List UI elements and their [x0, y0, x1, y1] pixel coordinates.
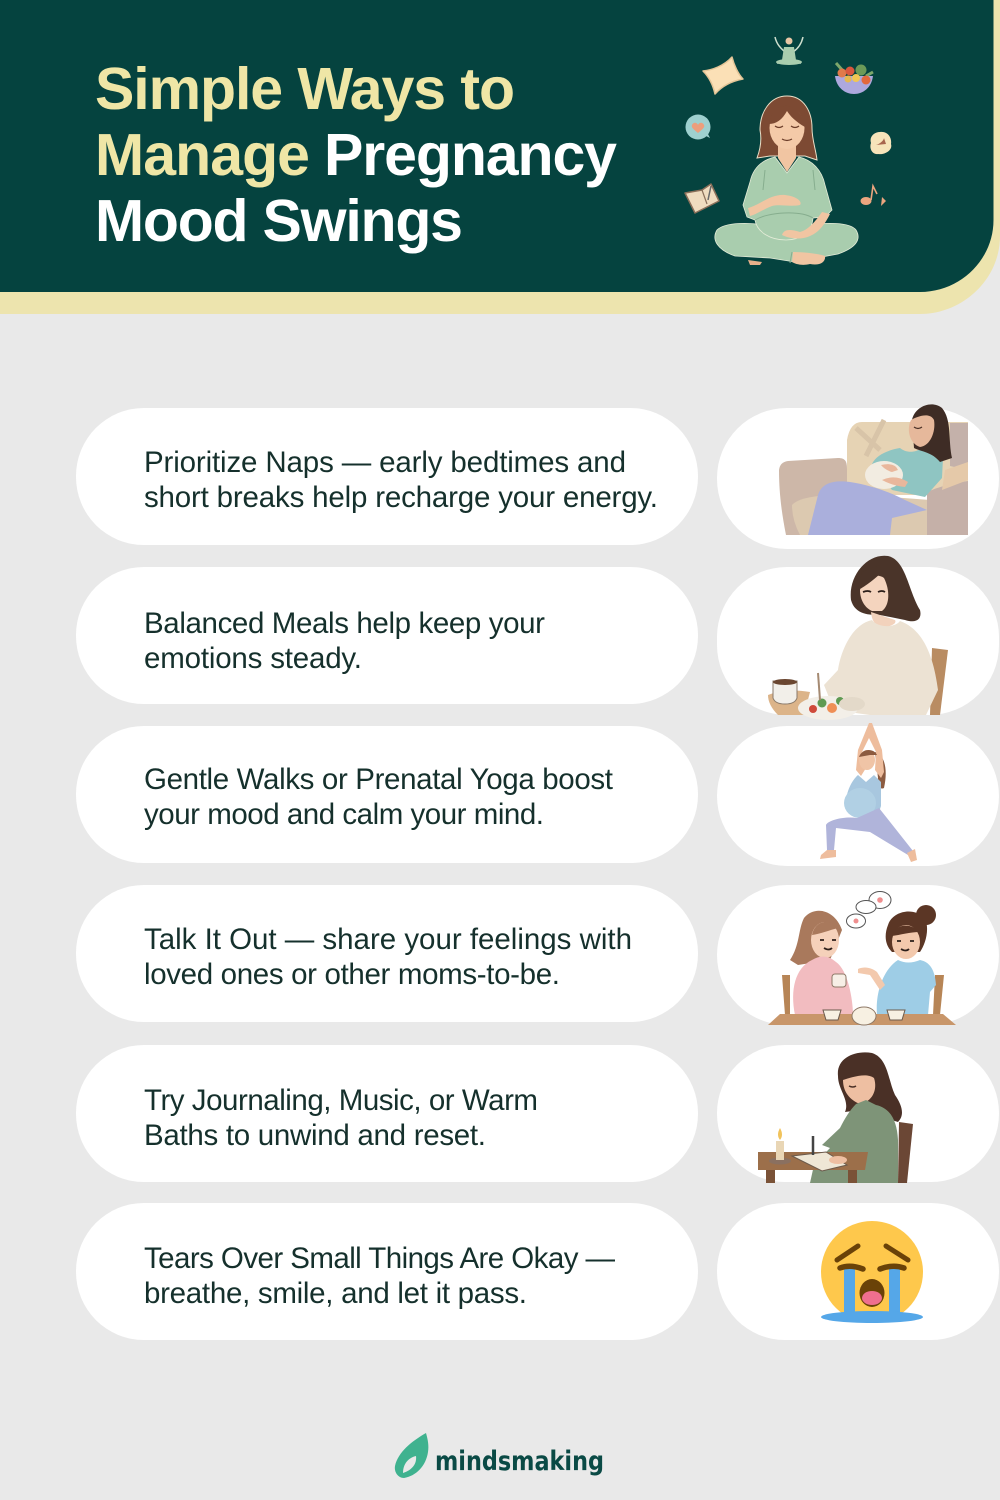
icon: heart speech bubble	[686, 114, 710, 140]
tip 3	[76, 723, 999, 866]
tip 4 text panel: loved ones or other moms-to-be.	[144, 958, 560, 991]
tip 6 text panel: breathe, smile, and let it pass.	[144, 1277, 527, 1310]
title	[95, 56, 617, 254]
illustration: two women talking over tea	[768, 892, 956, 1025]
tip 6 text panel	[76, 1203, 698, 1340]
tip 4 image pill	[717, 885, 999, 1025]
tip 5 text panel: Baths to unwind and reset.	[144, 1119, 486, 1152]
header banner	[0, 0, 1000, 314]
tip 2 text panel: Balanced Meals help keep your	[144, 607, 545, 640]
tip 1	[76, 404, 999, 549]
icon: loudly crying emoji	[821, 1221, 923, 1323]
tip 2 text panel: emotions steady.	[144, 642, 362, 675]
tip 2	[76, 556, 999, 720]
tip 6	[76, 1203, 999, 1340]
icon: pillow	[703, 57, 743, 94]
illustration: journaling by candlelight	[758, 1052, 913, 1183]
logo: mindsmaking	[395, 1433, 604, 1478]
tip 1 text panel: Prioritize Naps — early bedtimes and	[144, 446, 626, 479]
icon: open book	[685, 184, 719, 213]
tip 3 image pill	[717, 726, 999, 866]
tip 4 text panel	[76, 885, 698, 1022]
illustration: prenatal yoga pose	[820, 723, 917, 862]
tip 5 text panel: Try Journaling, Music, or Warm	[144, 1084, 538, 1117]
tip 6 image pill	[717, 1203, 999, 1340]
tip 5 text panel	[76, 1045, 698, 1182]
tip 6 text panel: Tears Over Small Things Are Okay —	[144, 1242, 616, 1275]
tip 3 text panel: your mood and calm your mind.	[144, 798, 544, 831]
tip 3 text panel	[76, 726, 698, 863]
icon: music notes	[860, 186, 886, 206]
tip 2 image pill	[717, 567, 999, 715]
logo leaf icon	[395, 1433, 428, 1478]
tip 4 text panel: Talk It Out — share your feelings with	[144, 923, 632, 956]
tip 5 image pill	[717, 1045, 999, 1182]
logo wordmark: mindsmaking	[435, 1446, 604, 1477]
title: Manage	[95, 122, 310, 188]
icon: cream shape	[870, 132, 891, 154]
illustration: eating a balanced meal	[768, 556, 948, 720]
tip 1 text panel: short breaks help recharge your energy.	[144, 481, 658, 514]
title: Simple Ways to	[95, 56, 515, 122]
tip 4	[76, 885, 999, 1025]
title: Pregnancy	[324, 122, 617, 188]
title: Mood Swings	[95, 188, 463, 254]
illustration: resting on sofa	[779, 404, 968, 535]
tip 5	[76, 1045, 999, 1183]
tip 1 image pill	[717, 408, 999, 549]
icon: yoga figure	[775, 37, 803, 65]
tip 2 text panel	[76, 567, 698, 704]
illustration: meditating pregnant woman	[715, 96, 858, 265]
tip 1 text panel	[76, 408, 698, 545]
icon: salad bowl	[835, 63, 873, 94]
tip 3 text panel: Gentle Walks or Prenatal Yoga boost	[144, 763, 613, 796]
